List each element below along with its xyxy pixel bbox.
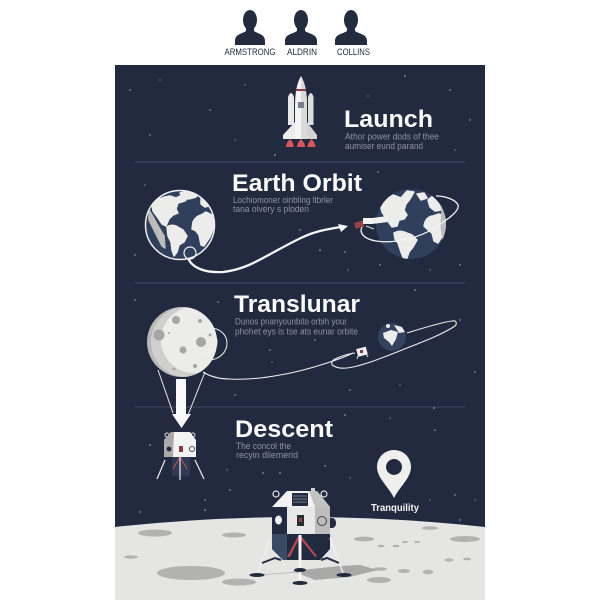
icon: small earth: [378, 323, 406, 351]
text block: descent: recyin dilemerid: [236, 450, 298, 460]
text block: descent: [236, 441, 298, 460]
icon: earth left: [146, 190, 214, 260]
icon: earth right: [376, 189, 447, 260]
text block: launch: aumiser eund parand: [345, 141, 423, 151]
section: descent: [157, 416, 411, 498]
text block: earth orbit: tana oivery s ploden: [233, 204, 309, 214]
text block: launch: Athor power dods of thee: [345, 132, 439, 142]
heading: Translunar: Translunar: [234, 291, 360, 318]
crew: Armstrong: [224, 10, 276, 57]
icon: spacecraft small: [356, 347, 368, 359]
crew: Collins: COLLINS: [337, 47, 370, 57]
icon: small lander: [157, 432, 204, 480]
craters: [124, 526, 480, 586]
text block: earth orbit: [233, 195, 333, 214]
text block: translunar: Dunos pnanyounbito orbih your: [235, 316, 347, 326]
label: Tranquility: Tranquility: [371, 502, 419, 514]
text block: launch: [345, 132, 439, 151]
icon: elliptical orbit: [332, 321, 456, 368]
panel: space background: [115, 65, 485, 600]
heading: Launch: Launch: [344, 106, 433, 133]
section: translunar: [147, 291, 456, 428]
icon: orbit ring: [361, 196, 458, 242]
section: launch: [283, 76, 439, 151]
crew: Aldrin: [285, 10, 317, 57]
dividers: [135, 162, 465, 407]
icon: lunar module: [250, 488, 352, 585]
icon: location pin: [377, 450, 411, 498]
text block: earth orbit: Lochiomoner oinbling ltbrler: [233, 195, 333, 205]
moon surface: [115, 517, 485, 600]
crew: Armstrong: ARMSTRONG: [224, 47, 276, 57]
icon: rocket: [283, 76, 317, 147]
icon: lunar orbit circle: [193, 328, 227, 360]
arrow: descent line: [158, 370, 205, 428]
crew: Aldrin: ALDRIN: [287, 47, 317, 57]
arrow: transfer trajectory: [184, 224, 348, 272]
heading: Earth Orbit: Earth Orbit: [232, 170, 362, 197]
crew: Collins: [335, 10, 370, 57]
text block: translunar: phohet eys is tse ats eunar orbite: [235, 326, 358, 336]
crew portraits: [224, 10, 370, 57]
icon: moon: [147, 307, 217, 377]
text block: translunar: [235, 316, 358, 336]
arrow: translunar trajectory: [203, 353, 353, 379]
heading: Descent: Descent: [235, 416, 333, 443]
text block: descent: The concol the: [236, 441, 291, 451]
section: earth orbit: [146, 170, 458, 272]
icon: spacecraft: [354, 216, 388, 229]
